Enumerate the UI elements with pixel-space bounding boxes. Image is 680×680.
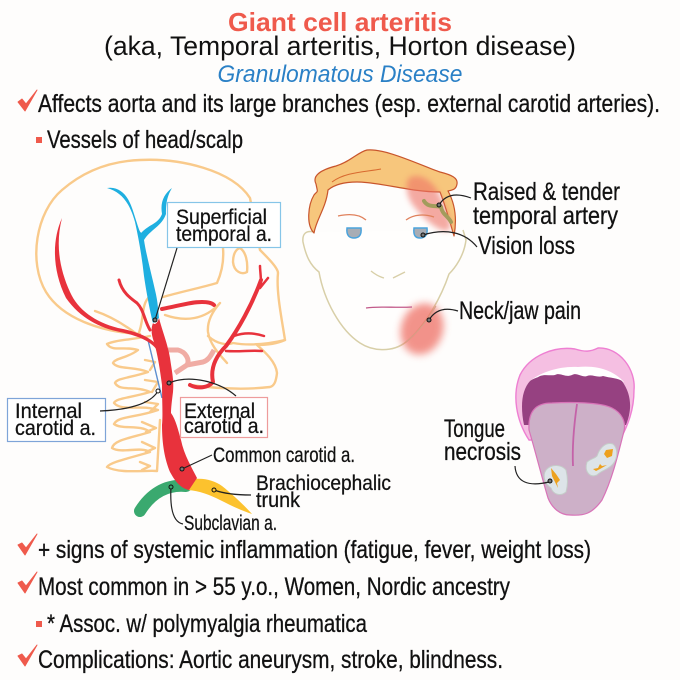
label: external carotid a.: External bbox=[184, 400, 255, 423]
label: brachiocephalic trunk bbox=[212, 472, 391, 512]
label: raised and tender temporal artery bbox=[437, 178, 620, 230]
diagram: tongue bbox=[444, 348, 634, 515]
diagram: face bbox=[303, 150, 620, 360]
label: raised and tender temporal artery: Raised & tender bbox=[473, 178, 620, 206]
label: internal carotid a.: Internal bbox=[15, 400, 82, 423]
inflammation: temple bbox=[407, 176, 450, 231]
sub-bullet: vessels of head and scalp: Vessels of head/scalp bbox=[47, 126, 243, 154]
vessel: occipital arch bbox=[55, 218, 157, 350]
tongue median groove bbox=[573, 404, 577, 466]
face outline bbox=[303, 230, 466, 350]
mouth interior bbox=[522, 374, 630, 425]
diagram: head and neck arteries bbox=[8, 160, 391, 535]
label: internal carotid a.: carotid a. bbox=[15, 417, 96, 440]
vessel: internal carotid thin line bbox=[148, 340, 162, 398]
mouth bbox=[366, 307, 412, 308]
label: superficial temporal a. bbox=[153, 202, 280, 322]
vessel: facial artery and branches bbox=[190, 266, 268, 387]
vessel: transverse facial bbox=[162, 302, 214, 309]
nose bbox=[371, 271, 405, 278]
heading: granulomatous disease: Granulomatous Disease bbox=[218, 61, 462, 88]
hair bbox=[309, 150, 457, 236]
label: common carotid a.: Common carotid a. bbox=[213, 444, 355, 467]
jaw outline over inflammation bbox=[406, 306, 436, 342]
subtitle: (aka, Temporal arteritis, Horton disease) bbox=[104, 31, 576, 61]
temporal artery bbox=[424, 201, 451, 222]
label: neck and jaw pain: Neck/jaw pain bbox=[459, 297, 581, 325]
vessel: superficial temporal bbox=[107, 188, 172, 323]
necrosis patch: right bbox=[586, 444, 617, 476]
necrosis patch: left bbox=[544, 465, 568, 495]
label: superficial temporal a.: temporal a. bbox=[176, 223, 272, 246]
bullet: complications: Complications: Aortic aneurysm, stroke, blindness. bbox=[38, 646, 503, 674]
bullet: most common demographics: Most common in > 55 y.o., Women, Nordic ancestry bbox=[38, 573, 510, 601]
label: brachiocephalic trunk: Brachiocephalic bbox=[256, 472, 391, 495]
label: raised and tender temporal artery: temporal artery bbox=[473, 202, 618, 230]
vessel: posterior branch bbox=[119, 280, 150, 330]
label: external carotid a. bbox=[167, 379, 268, 438]
label: common carotid a. bbox=[180, 444, 355, 471]
sub-bullet: polymyalgia rheumatica: * Assoc. w/ polymyalgia rheumatica bbox=[47, 610, 367, 638]
vessel: common and external carotid bbox=[152, 318, 197, 490]
title: Giant cell arteritis bbox=[228, 7, 452, 37]
label: tongue necrosis: necrosis bbox=[444, 438, 521, 466]
tongue body bbox=[529, 403, 624, 515]
label: tongue necrosis: Tongue bbox=[444, 415, 505, 443]
inflammation: jaw bbox=[394, 298, 450, 360]
label: brachiocephalic trunk: trunk bbox=[256, 489, 300, 512]
label: vision loss bbox=[421, 232, 575, 260]
label: subclavian a.: Subclavian a. bbox=[184, 512, 277, 535]
label: superficial temporal a.: Superficial bbox=[176, 206, 267, 229]
label: vision loss: Vision loss bbox=[478, 232, 575, 260]
teeth gap bbox=[529, 367, 624, 382]
vessel: brachiocephalic trunk bbox=[188, 479, 252, 514]
label: tongue necrosis bbox=[444, 415, 552, 484]
vessel: faded branch bbox=[168, 350, 214, 373]
eyebrows bbox=[338, 215, 434, 220]
lips bbox=[516, 348, 634, 440]
eye: left bbox=[347, 228, 361, 238]
skull outline bbox=[36, 160, 285, 389]
cervical spine bbox=[107, 336, 160, 471]
label: subclavian a. bbox=[169, 485, 277, 535]
hair strand bbox=[332, 169, 381, 182]
vessel: subclavian bbox=[140, 486, 186, 511]
label: neck and jaw pain bbox=[427, 297, 581, 325]
label: external carotid a.: carotid a. bbox=[184, 415, 264, 438]
label: internal carotid a. bbox=[8, 389, 160, 442]
eye: right bbox=[414, 228, 427, 238]
